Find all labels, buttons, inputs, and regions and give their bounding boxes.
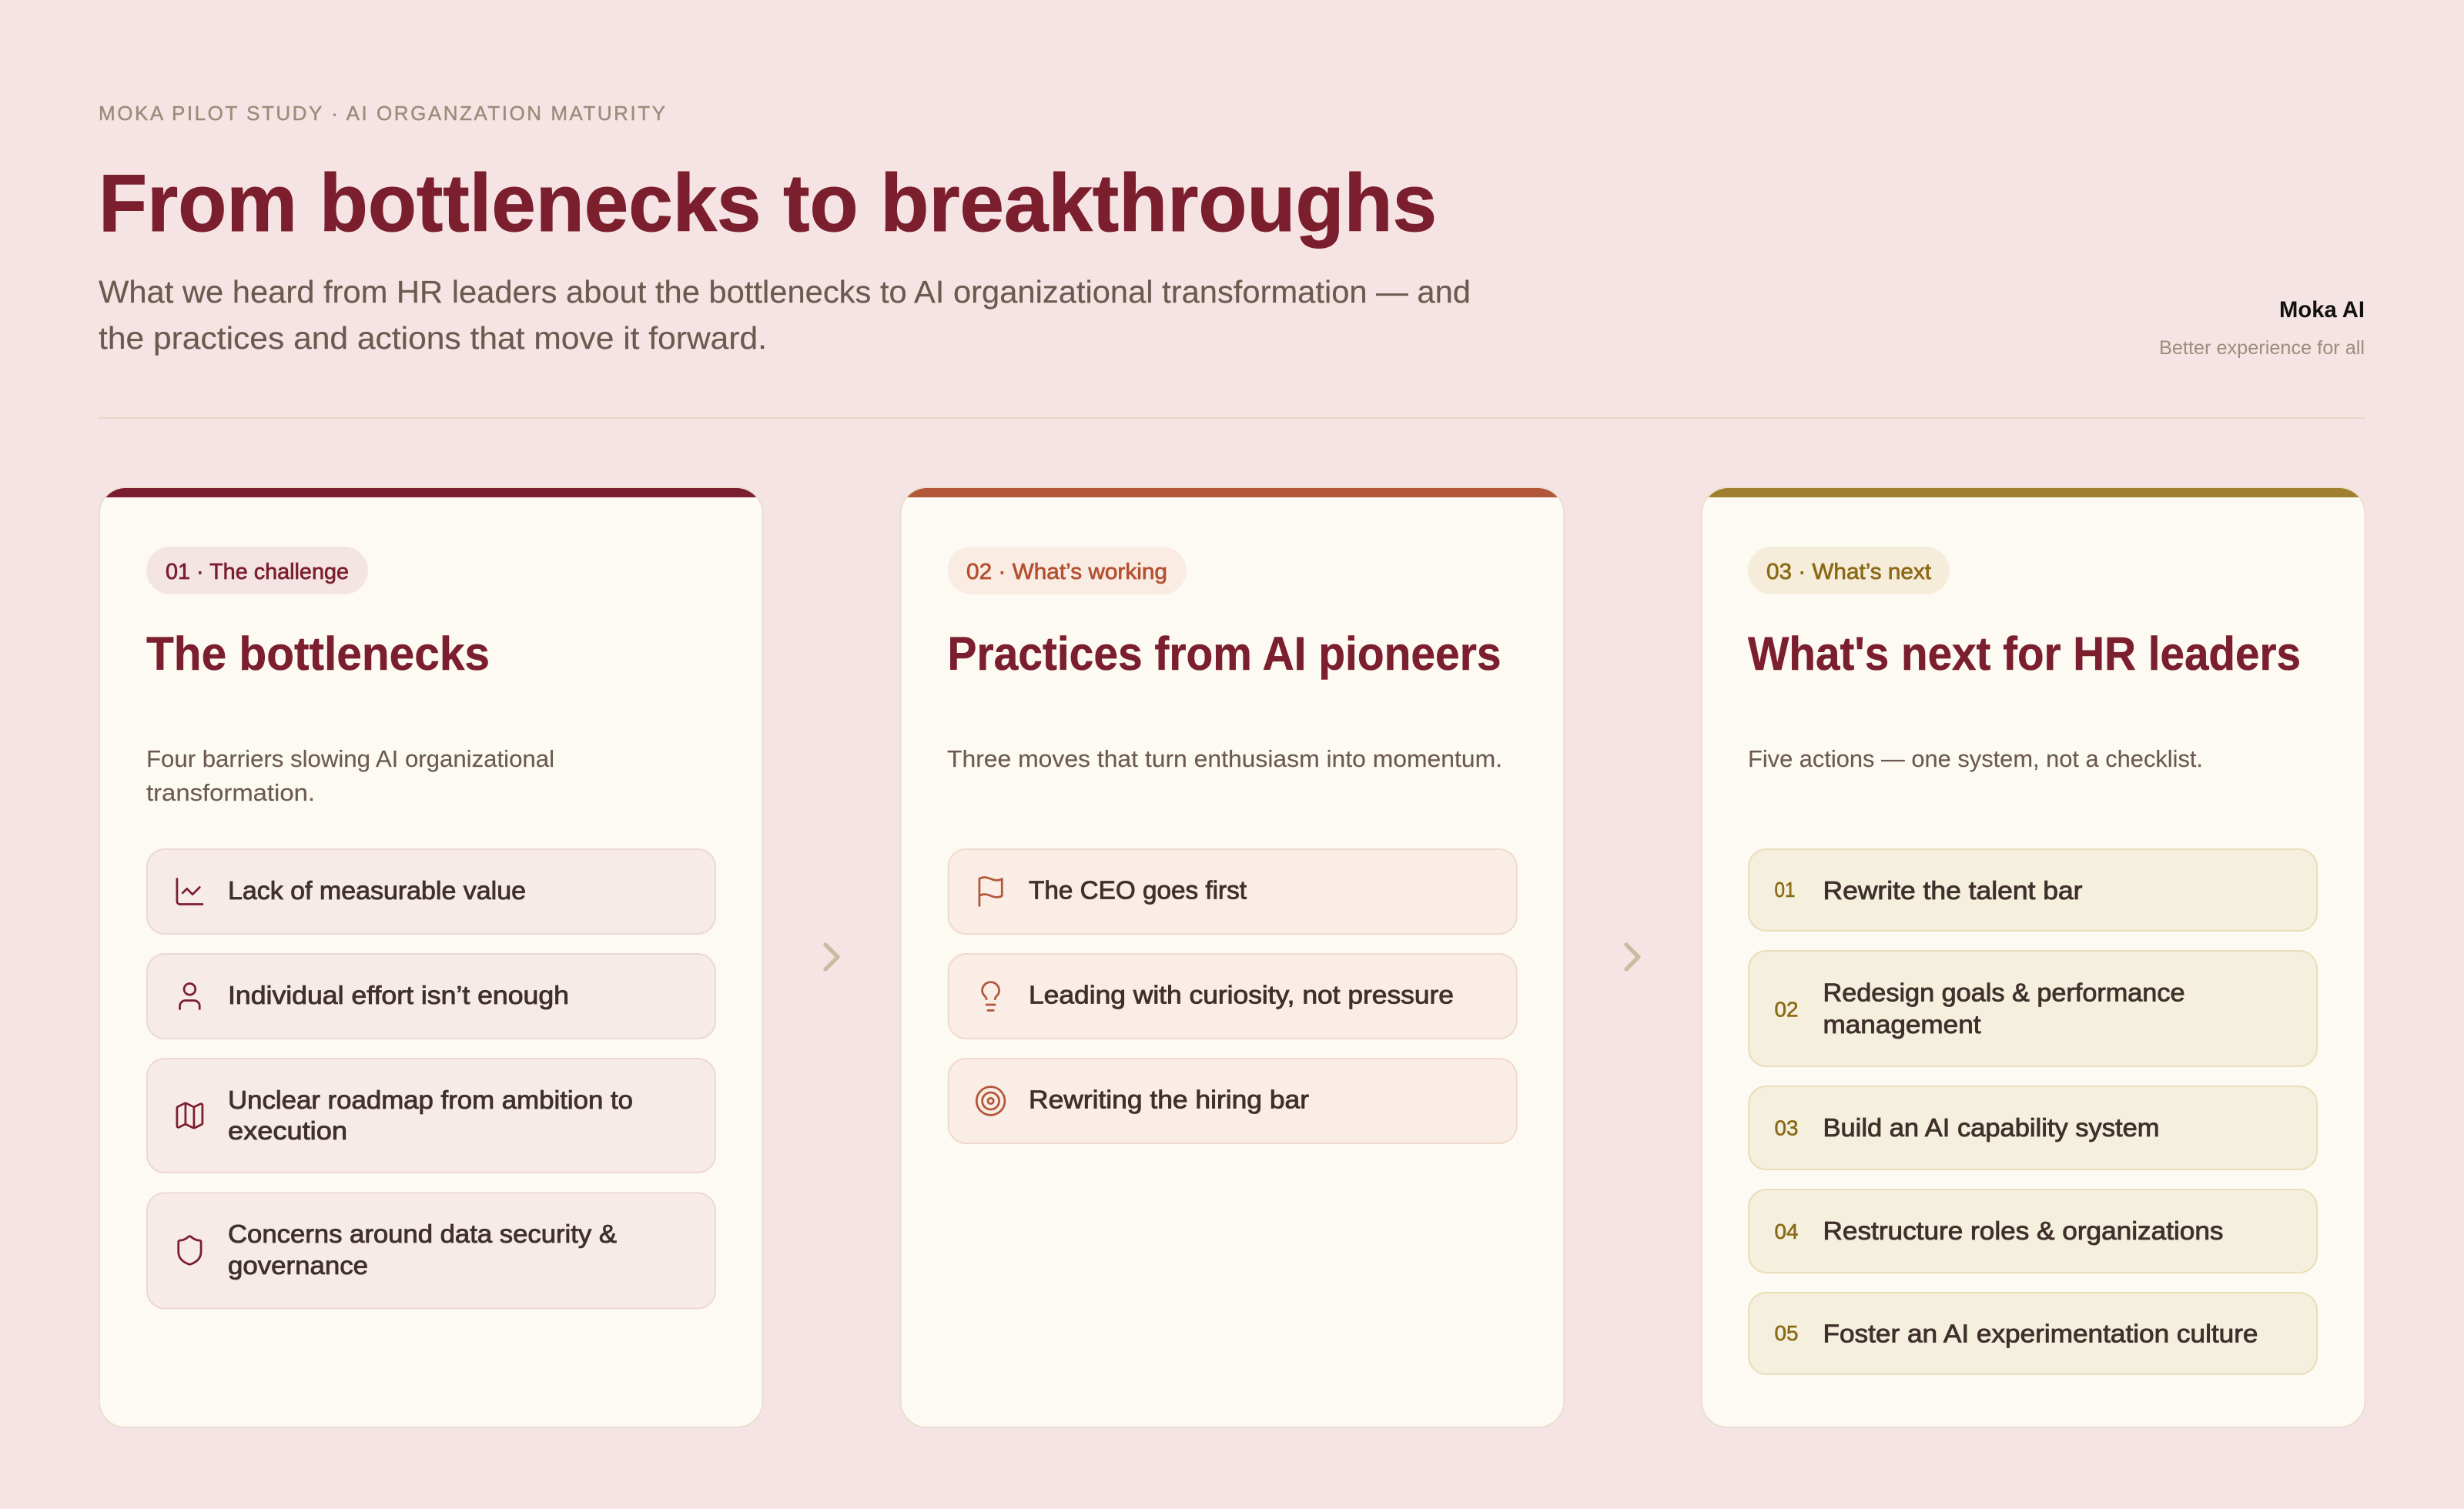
- arrow: practices to next: [1626, 945, 1639, 969]
- heading: The bottlenecks: [146, 627, 490, 680]
- item 05: experimentation culture: Foster an AI experimentation culture: [1823, 1320, 2258, 1347]
- pill: 03 what's next: 03 · What’s next: [1766, 560, 1931, 584]
- item 02: goals and performance: 02: [1774, 998, 1799, 1021]
- description: [146, 745, 554, 806]
- item 05: experimentation culture: [1749, 1293, 2317, 1374]
- subtitle: [99, 274, 1471, 356]
- item: unclear roadmap: [147, 1059, 715, 1173]
- description: transformation.: [146, 779, 315, 806]
- item 03: capability system: Build an AI capability system: [1823, 1113, 2159, 1142]
- brand: Moka AI: [2279, 297, 2365, 323]
- subtitle: the practices and actions that move it forward.: [99, 320, 767, 356]
- eyebrow: MOKA PILOT STUDY · AI ORGANZATION MATURITY: [99, 102, 665, 125]
- item: curiosity: [949, 954, 1517, 1039]
- icon: target: [976, 1087, 1005, 1115]
- item: hiring bar: [949, 1059, 1517, 1143]
- brand: Better experience for all: [2159, 337, 2365, 359]
- item 04: roles and organizations: 04: [1774, 1220, 1799, 1243]
- header: [99, 102, 2365, 359]
- item: individual effort: Individual effort isn’t enough: [228, 981, 569, 1009]
- item 04: roles and organizations: Restructure roles & organizations: [1823, 1216, 2224, 1245]
- description: Five actions — one system, not a checklist.: [1748, 745, 2203, 772]
- heading: What's next for HR leaders: [1748, 627, 2301, 680]
- icon: shield: [179, 1236, 201, 1264]
- description: Three moves that turn enthusiasm into momentum.: [947, 745, 1502, 772]
- item: lack of measurable value: Lack of measurable value: [228, 876, 526, 905]
- arrow: challenge to practices: [825, 945, 838, 969]
- item: hiring bar: Rewriting the hiring bar: [1029, 1086, 1309, 1113]
- item 02: goals and performance: Redesign goals & performance: [1823, 978, 2185, 1007]
- pill: 02 what's working: [948, 547, 1187, 594]
- item 05: experimentation culture: 05: [1774, 1321, 1799, 1345]
- pill: 01 the challenge: 01 · The challenge: [166, 560, 349, 584]
- item: unclear roadmap: Unclear roadmap from ambition to: [228, 1086, 633, 1114]
- item 01: talent bar: 01: [1774, 878, 1796, 902]
- icon: flag: [979, 878, 1002, 905]
- item: ceo goes first: [949, 849, 1517, 934]
- description: Four barriers slowing AI organizational: [146, 745, 554, 772]
- item 01: talent bar: Rewrite the talent bar: [1823, 876, 2082, 905]
- item: individual effort: [147, 954, 715, 1039]
- icon: light bulb: [983, 982, 999, 1010]
- item: data security: Concerns around data security &: [228, 1220, 617, 1248]
- item: ceo goes first: The CEO goes first: [1029, 876, 1247, 904]
- item: curiosity: Leading with curiosity, not pressure: [1029, 981, 1454, 1009]
- subtitle: What we heard from HR leaders about the bottlenecks to AI organizational transformation — and: [99, 274, 1471, 309]
- item 02: goals and performance: management: [1823, 1010, 1980, 1039]
- item 02: goals and performance: [1749, 951, 2317, 1066]
- pill: 03 what's next: [1748, 547, 1950, 594]
- item 03: capability system: 03: [1774, 1116, 1799, 1139]
- item: data security: [147, 1193, 715, 1309]
- item 03: capability system: [1749, 1086, 2317, 1169]
- pill: 01 the challenge: [146, 547, 368, 594]
- item 01: talent bar: [1749, 849, 2317, 931]
- icon: map: [177, 1103, 203, 1128]
- panel: practices from ai pioneers: [901, 487, 1564, 1428]
- heading: Practices from AI pioneers: [947, 627, 1502, 680]
- item: unclear roadmap: execution: [228, 1116, 347, 1145]
- item: data security: governance: [228, 1251, 368, 1280]
- brand: [2159, 297, 2365, 359]
- panel: what's next for hr leaders: [1702, 487, 2365, 1428]
- item 04: roles and organizations: [1749, 1189, 2317, 1273]
- title: From bottlenecks to breakthroughs: [99, 158, 1437, 249]
- icon: line chart: [177, 878, 203, 904]
- icon: person: [180, 983, 199, 1009]
- pill: 02 what's working: 02 · What’s working: [966, 560, 1167, 584]
- item: lack of measurable value: [147, 849, 715, 934]
- panel: the bottlenecks: [99, 487, 763, 1428]
